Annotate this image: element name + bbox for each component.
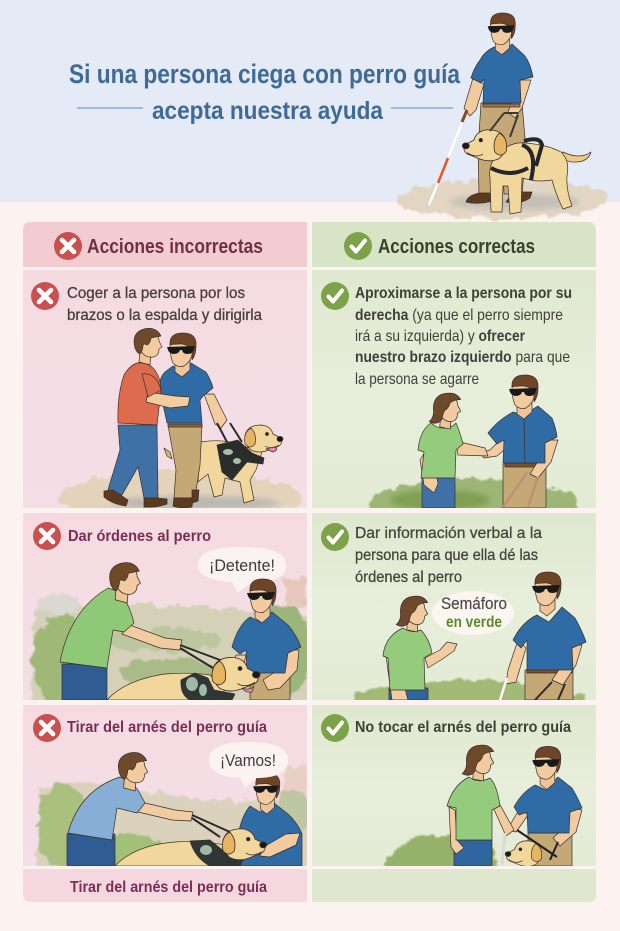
text block: Aproximarse a la persona por su (355, 285, 572, 302)
speech bubble: ¡Detente! (209, 556, 275, 575)
guide dog (462, 130, 591, 214)
panel: pulling the harness (23, 705, 313, 870)
column heading: correct: Acciones correctas (378, 236, 535, 258)
speech bubble (432, 591, 514, 635)
illustration: offering the arm (368, 374, 578, 508)
white cane (429, 113, 466, 205)
landscape (30, 578, 313, 705)
text block: persona para que ella dé las (355, 547, 538, 564)
icon: check (321, 282, 349, 310)
panel: verbal information (312, 513, 596, 720)
icon: check (321, 523, 349, 551)
text block: Dar información verbal a la (355, 525, 542, 542)
column heading: incorrect (23, 222, 307, 267)
text block: órdenes al perro (355, 569, 462, 586)
panel: giving orders to the dog (23, 513, 313, 705)
text block (355, 285, 572, 388)
text block (355, 525, 542, 586)
text block: nuestro brazo izquierdo para que (355, 349, 570, 366)
title: Si una persona ciega con perro guía (69, 59, 461, 89)
panel: not touching the harness (312, 705, 596, 866)
illustration: man steering blind person (58, 328, 302, 523)
illustration: man pulling at the dog (30, 547, 313, 705)
speech bubble (209, 742, 288, 788)
icon: check (321, 714, 349, 742)
speech bubble: Semáforo (441, 595, 507, 613)
bottom strip: pulling the harness caption: Tirar del arnés del perro guía (70, 879, 267, 896)
text block (67, 285, 262, 324)
dog harness straps (491, 139, 542, 180)
panel: approach from the right (312, 270, 596, 531)
speech bubble (198, 547, 286, 593)
text block: derecha (ya que el perro siempre (355, 307, 563, 324)
text block: irá a su izquierda) y ofrecer (355, 328, 525, 345)
illustration: woman talking to blind man (353, 572, 586, 700)
text block: la persona se agarre (355, 371, 479, 388)
man (464, 13, 533, 203)
column heading: incorrect: Acciones incorrectas (87, 236, 263, 258)
ground patch (396, 179, 608, 219)
landscape (36, 766, 313, 870)
speech bubble: ¡Vamos! (220, 751, 276, 770)
header band (0, 0, 620, 202)
text block: Coger a la persona por los (67, 285, 245, 302)
illustration: man pulling harness (36, 742, 313, 870)
bottom strip: pulling the harness caption (23, 869, 307, 902)
icon: cross (33, 522, 61, 550)
column heading: correct (312, 222, 596, 267)
title (69, 59, 461, 125)
heading text: No tocar el arnés del perro guía (355, 719, 571, 736)
illustration: blind man with cane and guide dog (396, 13, 608, 219)
heading text: Dar órdenes al perro (68, 528, 211, 545)
speech bubble: en verde (446, 614, 502, 631)
icon: check (344, 232, 372, 260)
text block: brazos o la espalda y dirigirla (67, 307, 262, 324)
bottom strip: empty green panel (312, 869, 596, 902)
heading text: Tirar del arnés del perro guía (67, 719, 267, 736)
icon: cross (54, 232, 82, 260)
illustration: woman beside blind man and dog (383, 744, 582, 866)
title: acepta nuestra ayuda (152, 97, 384, 125)
panel: grabbing the person (23, 270, 307, 523)
icon: cross (31, 282, 59, 310)
icon: cross (33, 714, 61, 742)
harness handle (490, 113, 518, 137)
